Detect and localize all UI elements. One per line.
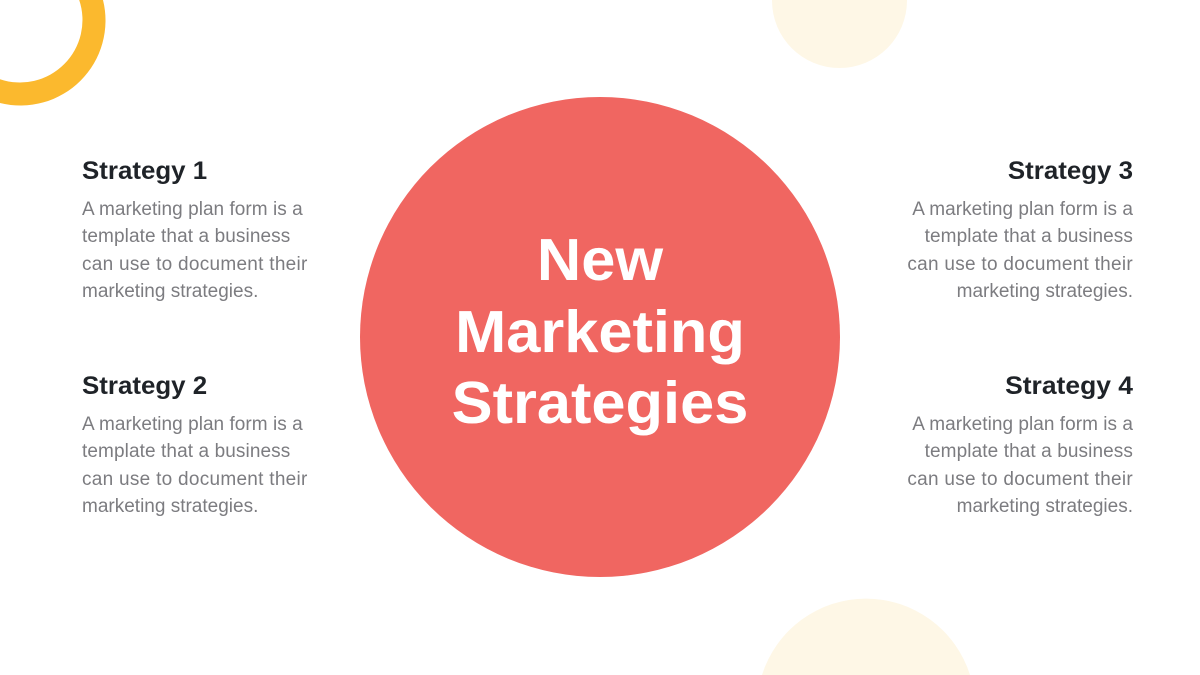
panel: strategy 1 xyxy=(82,157,308,302)
panel: strategy 2: Strategy 2 xyxy=(82,372,207,400)
panel: strategy 2: A marketing plan form is a xyxy=(82,414,303,435)
central circle xyxy=(360,97,840,577)
panel: strategy 3: can use to document their xyxy=(907,254,1133,275)
panel: strategy 4: template that a business xyxy=(925,441,1133,462)
title xyxy=(452,227,748,436)
panel: strategy 1: template that a business xyxy=(82,226,290,247)
panel: strategy 4: A marketing plan form is a xyxy=(912,414,1133,435)
panel: strategy 1: marketing strategies. xyxy=(82,281,258,302)
panel: strategy 4: can use to document their xyxy=(907,469,1133,490)
panel: strategy 4 xyxy=(907,372,1133,517)
decorative circle: top xyxy=(772,0,907,68)
panel: strategy 3 xyxy=(907,157,1133,302)
panel: strategy 3: template that a business xyxy=(925,226,1133,247)
panel: strategy 2 xyxy=(82,372,308,517)
panel: strategy 3: Strategy 3 xyxy=(1008,157,1133,185)
title: Marketing xyxy=(455,298,745,364)
decorative circle: bottom xyxy=(762,599,970,675)
panel: strategy 2: can use to document their xyxy=(82,469,308,490)
panel: strategy 1: A marketing plan form is a xyxy=(82,199,303,220)
panel: strategy 4: marketing strategies. xyxy=(957,496,1133,517)
panel: strategy 1: can use to document their xyxy=(82,254,308,275)
panel: strategy 2: marketing strategies. xyxy=(82,496,258,517)
decorative ring: top-left xyxy=(0,0,106,106)
panel: strategy 1: Strategy 1 xyxy=(82,157,207,185)
panel: strategy 3: marketing strategies. xyxy=(957,281,1133,302)
panel: strategy 3: A marketing plan form is a xyxy=(912,199,1133,220)
title: New xyxy=(537,227,663,293)
title: Strategies xyxy=(452,370,748,436)
panel: strategy 4: Strategy 4 xyxy=(1005,372,1133,400)
panel: strategy 2: template that a business xyxy=(82,441,290,462)
